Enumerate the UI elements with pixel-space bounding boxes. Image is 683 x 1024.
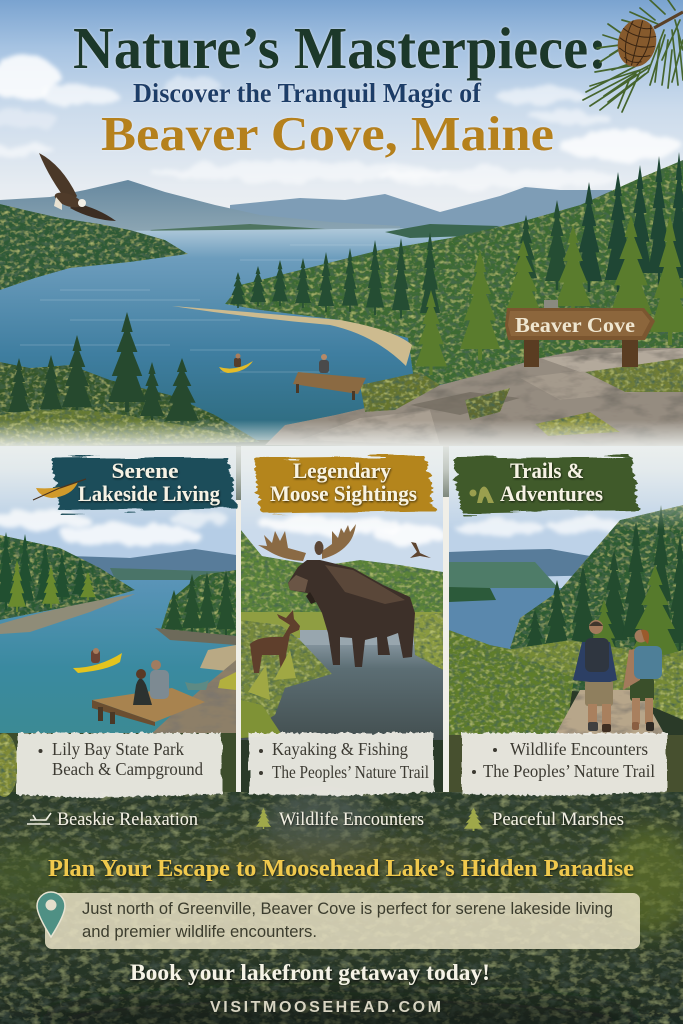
info box: and premier wildlife encounters. [82,922,317,941]
panel: serene lakeside scene [0,446,236,800]
sky background [0,0,683,240]
hiker two [623,630,662,731]
banner: trails and adventures [455,456,639,513]
title: Nature’s Masterpiece: [73,15,607,81]
website: VISITMOOSEHEAD.COM [210,999,441,1016]
pine branch and cone [583,0,683,112]
panel: moose scene [241,446,446,740]
banner: serene lakeside living: Serene [112,458,179,483]
mist band [0,420,683,530]
foreground left trees [0,312,260,448]
card: wildlife: Wildlife Encounters [510,739,648,759]
card: lily bay: Beach & Campground [52,759,203,779]
banner: serene lakeside living: Lakeside Living [78,481,220,506]
call to action heading: Plan Your Escape to Moosehead Lake’s Hidden Paradise [48,856,634,882]
icon: map pin [37,892,65,937]
title: Beaver Cove, Maine [101,106,554,161]
rocky outcrop [265,348,683,450]
lake [0,226,683,440]
sandy point [172,306,412,366]
moose calf [250,610,300,673]
info box [45,893,640,949]
banner: serene lakeside living [33,456,236,512]
right forest [225,152,683,388]
card: kayaking [249,733,434,796]
small bird [410,542,431,558]
icon row: highlights: Beaskie Relaxation [57,810,198,830]
lake ripples [20,245,400,372]
dock and person [293,354,366,400]
moose [258,524,415,667]
far shore [385,224,500,238]
banner: trails and adventures: Adventures [500,481,603,506]
title [73,15,607,161]
distant mountains [0,180,612,240]
card: lily bay: Lily Bay State Park [52,739,184,759]
hiker one [573,620,617,732]
icon row: highlights: Wildlife Encounters [279,810,424,830]
yellow kayak [219,354,253,373]
card: wildlife [462,733,667,796]
eagle [39,153,116,221]
icon: small tree [256,808,271,829]
wooden sign: Beaver Cove [505,300,655,367]
booking line: Book your lakefront getaway today! [130,960,490,985]
icon row: highlights: Peaceful Marshes [492,810,624,830]
bottom forest background [0,733,683,1024]
card: kayaking: Kayaking & Fishing [272,739,408,759]
icon: canoe [33,479,86,500]
card: wildlife: The Peoples’ Nature Trail [483,761,655,781]
banner: legendary moose sightings [255,456,435,513]
card: kayaking: The Peoples’ Nature Trail [272,762,429,782]
clouds [0,56,682,187]
banner: legendary moose sightings: Moose Sightings [270,481,417,506]
icon row: highlights [27,808,624,831]
icon: beach lounger [27,813,51,824]
icon: trail [470,486,494,503]
banner: trails and adventures: Trails & [510,458,584,483]
panel: trails scene [449,446,683,800]
icon: tree [464,808,483,831]
card: lily bay [17,733,222,798]
far left forest [0,204,188,290]
title: Discover the Tranquil Magic of [133,78,482,108]
wooden sign: Beaver Cove: Beaver Cove [515,313,635,337]
banner: legendary moose sightings: Legendary [293,458,391,483]
info box: Just north of Greenville, Beaver Cove is perfect for serene lakeside living [82,899,613,918]
panel dividers [236,497,449,800]
